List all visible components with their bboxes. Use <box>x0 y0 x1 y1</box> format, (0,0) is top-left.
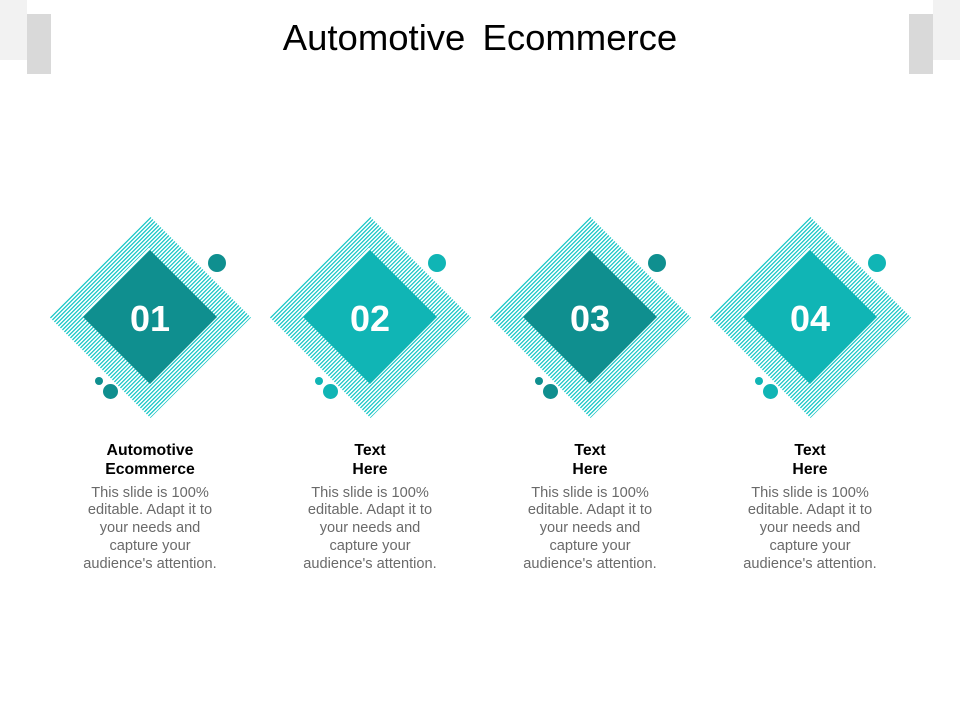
title: Automotive Ecommerce <box>283 17 677 58</box>
corner decoration: top left <box>0 0 51 74</box>
text block 02: editable. Adapt it to <box>308 502 432 518</box>
dot small 02 <box>315 377 323 385</box>
text block 04: Here <box>792 461 828 478</box>
dot large 01 <box>208 254 226 272</box>
text block 03: your needs and <box>540 520 640 536</box>
text block 04: Text <box>794 442 826 459</box>
inner diamond 01 <box>83 250 217 384</box>
dot small 01 <box>95 377 103 385</box>
text block 02: Here <box>352 461 388 478</box>
dot large 02 <box>428 254 446 272</box>
text block 02: capture your <box>329 538 411 554</box>
diamond 03 <box>522 249 666 399</box>
inner gap edge 02 <box>302 249 370 316</box>
dot medium 02 <box>323 384 338 399</box>
inner gap edge 04 <box>742 249 810 316</box>
text block 01: editable. Adapt it to <box>88 502 212 518</box>
number 03: 03 <box>570 298 610 339</box>
text block 04: editable. Adapt it to <box>748 502 872 518</box>
text block 02 <box>303 442 437 572</box>
text block 01: audience's attention. <box>83 556 217 572</box>
text block 01: Automotive <box>107 442 193 459</box>
text block 03: Text <box>574 442 606 459</box>
text block 04: This slide is 100% <box>751 484 869 500</box>
text block 04: audience's attention. <box>743 556 877 572</box>
diamond 02 <box>302 249 446 399</box>
text block 04 <box>743 442 877 572</box>
number 04: 04 <box>790 298 830 339</box>
striped diamond 03 <box>540 267 641 368</box>
corner decoration: top right <box>909 0 960 74</box>
text block 01 <box>83 442 217 572</box>
diamond 01 <box>82 249 226 399</box>
text block 01: your needs and <box>100 520 200 536</box>
text block 01: capture your <box>109 538 191 554</box>
dot small 03 <box>535 377 543 385</box>
striped diamond 01 <box>100 267 201 368</box>
dot medium 01 <box>103 384 118 399</box>
number 02: 02 <box>350 298 390 339</box>
text block 01: This slide is 100% <box>91 484 209 500</box>
number 01: 01 <box>130 298 170 339</box>
text block 03 <box>523 442 657 572</box>
text block 04: capture your <box>769 538 851 554</box>
text block 03: Here <box>572 461 608 478</box>
text block 01: Ecommerce <box>105 461 195 478</box>
text block 03: capture your <box>549 538 631 554</box>
dot large 04 <box>868 254 886 272</box>
dot large 03 <box>648 254 666 272</box>
dot medium 03 <box>543 384 558 399</box>
inner diamond 03 <box>523 250 657 384</box>
striped diamond 02 <box>320 267 421 368</box>
text block 02: This slide is 100% <box>311 484 429 500</box>
text block 02: Text <box>354 442 386 459</box>
inner gap edge 03 <box>522 249 590 316</box>
dot medium 04 <box>763 384 778 399</box>
text block 03: This slide is 100% <box>531 484 649 500</box>
dot small 04 <box>755 377 763 385</box>
text block 03: editable. Adapt it to <box>528 502 652 518</box>
text block 03: audience's attention. <box>523 556 657 572</box>
text block 02: your needs and <box>320 520 420 536</box>
inner gap edge 01 <box>82 249 150 316</box>
inner diamond 04 <box>743 250 877 384</box>
striped diamond 04 <box>760 267 861 368</box>
text block 04: your needs and <box>760 520 860 536</box>
text block 02: audience's attention. <box>303 556 437 572</box>
inner diamond 02 <box>303 250 437 384</box>
diamond 04 <box>742 249 886 399</box>
